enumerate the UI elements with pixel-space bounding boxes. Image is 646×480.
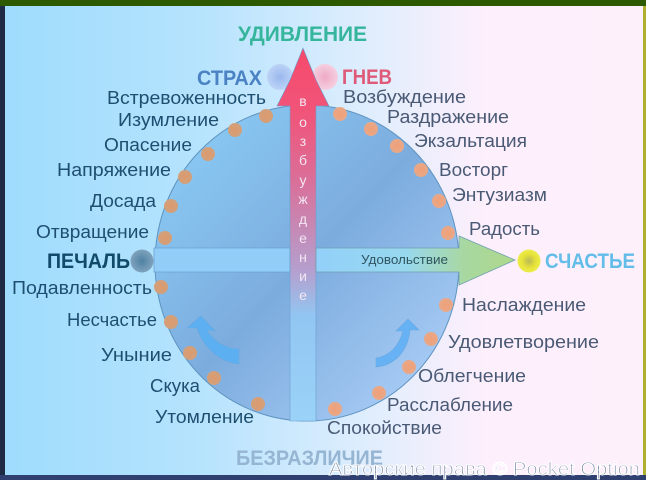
- arousal axis label: д: [299, 211, 307, 227]
- right labels: Расслабление: [387, 395, 513, 415]
- emotion dots right: [328, 107, 455, 416]
- right labels: Возбуждение: [343, 87, 466, 107]
- copyright watermark: Авторские права © Pocket Option: [329, 459, 640, 479]
- arousal axis label: б: [299, 152, 307, 168]
- heading: fear: СТРАХ: [197, 67, 262, 90]
- right frame band: [643, 6, 646, 475]
- emotion circle: [155, 105, 459, 421]
- curved arrow left: [187, 316, 239, 364]
- curved arrow right: [376, 319, 419, 367]
- left labels: Изумление: [118, 110, 219, 130]
- left labels: Скука: [150, 376, 201, 396]
- left labels: Несчастье: [67, 310, 157, 330]
- marker: fear: [267, 64, 293, 90]
- marker: anger: [312, 64, 338, 90]
- right labels: Экзальтация: [414, 131, 527, 151]
- right labels: Энтузиазм: [452, 185, 547, 205]
- arousal axis label: у: [300, 172, 306, 188]
- arousal axis arrow: [277, 48, 329, 421]
- right labels: Наслаждение: [462, 295, 586, 315]
- left labels: Досада: [90, 191, 157, 211]
- arousal axis label: ж: [298, 191, 308, 207]
- pleasure axis label: Удовольствие: [361, 252, 448, 267]
- left labels: Подавленность: [12, 278, 152, 298]
- heading: indifference: БЕЗРАЗЛИЧИЕ: [236, 447, 383, 470]
- marker: happiness: [518, 250, 540, 272]
- heading: happiness: СЧАСТЬЕ: [545, 250, 635, 273]
- heading: anger: ГНЕВ: [342, 66, 392, 89]
- arousal axis label: в: [299, 93, 307, 109]
- arousal axis label: н: [299, 249, 307, 265]
- right labels: Раздражение: [387, 107, 509, 127]
- left labels: Напряжение: [57, 160, 171, 180]
- right labels: Радость: [469, 219, 540, 239]
- left labels: Встревоженность: [107, 88, 266, 108]
- top frame band: [0, 0, 646, 6]
- marker: sadness: [130, 250, 154, 272]
- right labels: [327, 87, 599, 438]
- left labels: Опасение: [104, 135, 192, 155]
- arousal axis label: з: [300, 133, 306, 149]
- heading: sadness: ПЕЧАЛЬ: [47, 250, 130, 273]
- pleasure axis arrow: [154, 236, 515, 285]
- right labels: Облегчение: [418, 366, 526, 386]
- left frame band: [0, 6, 5, 480]
- left labels: Уныние: [101, 345, 172, 365]
- heading: surprise: УДИВЛЕНИЕ: [238, 23, 367, 46]
- left labels: [12, 88, 266, 427]
- right labels: Восторг: [439, 160, 508, 180]
- right labels: Удовлетворение: [448, 332, 599, 352]
- arousal axis label: е: [299, 230, 307, 246]
- emotion dots left: [154, 109, 273, 411]
- right labels: Спокойствие: [327, 418, 442, 438]
- arousal axis label: о: [299, 114, 307, 130]
- arousal axis label: е: [299, 287, 307, 303]
- bottom frame band: [0, 475, 646, 480]
- left labels: Утомление: [155, 407, 254, 427]
- left labels: Отвращение: [36, 222, 149, 242]
- arousal axis label: и: [299, 268, 307, 284]
